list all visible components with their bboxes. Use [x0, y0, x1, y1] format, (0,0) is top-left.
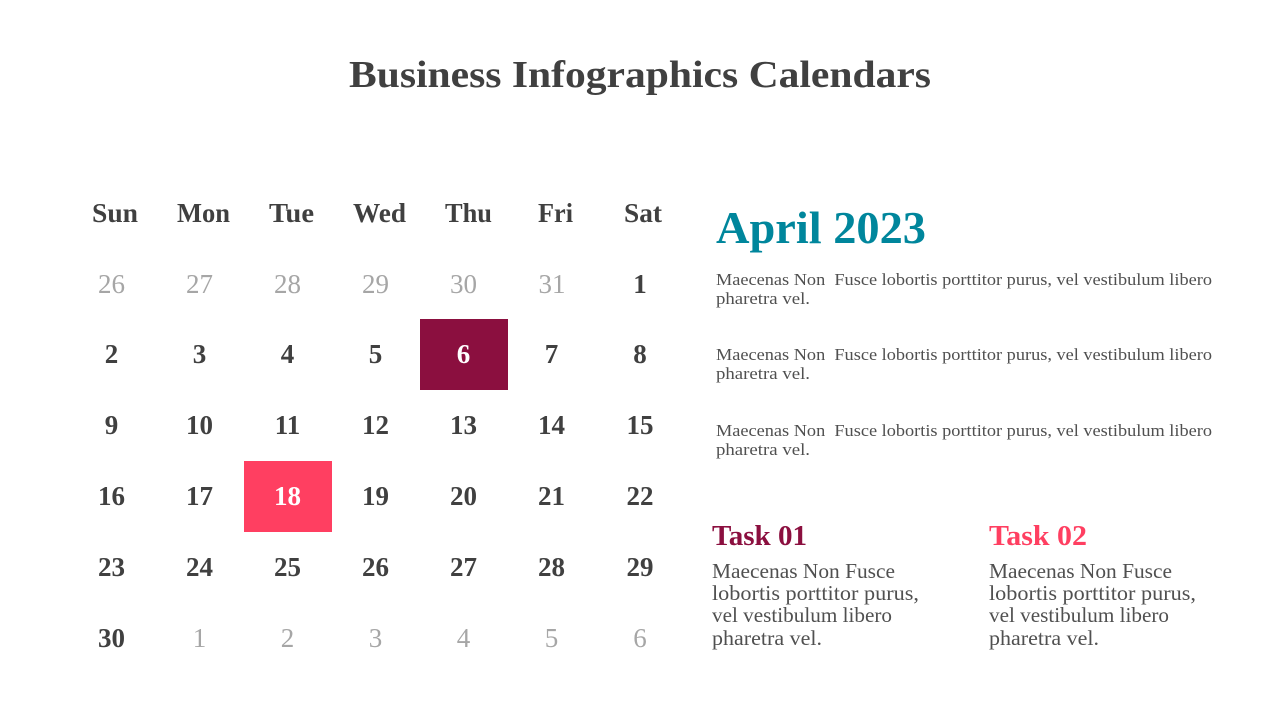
- text block 3: Maecenas Non Fusce lobortis porttitor purus, vel vestibulum libero: [716, 421, 1212, 440]
- text block 2: Maecenas Non Fusce lobortis porttitor purus, vel vestibulum libero: [716, 345, 1212, 364]
- task 02 description: lobortis porttitor purus,: [989, 581, 1196, 605]
- weekday header row: [92, 198, 662, 228]
- week row 1: 29: [362, 269, 389, 299]
- weekday header row: Thu: [445, 198, 492, 228]
- week row 5: 28: [538, 552, 565, 582]
- week row 3: 14: [538, 410, 565, 440]
- text block 3: pharetra vel.: [716, 440, 810, 459]
- text block 2: pharetra vel.: [716, 364, 810, 383]
- week row 2: 2: [105, 339, 118, 369]
- week row 2: 8: [633, 339, 647, 369]
- week row 2: 4: [281, 339, 294, 369]
- week row 4: 20: [450, 481, 477, 511]
- week row 1: 1: [633, 269, 647, 299]
- week row 4: 22: [626, 481, 654, 511]
- weekday header row: Sat: [624, 198, 662, 228]
- text block 1: [716, 270, 1212, 308]
- week row 3: 13: [450, 410, 477, 440]
- week row 4: 18: [274, 481, 301, 511]
- week row 6: [98, 623, 647, 653]
- week row 6: 6: [633, 623, 647, 653]
- week row 3: 15: [626, 410, 654, 440]
- week row 2: 6: [457, 339, 470, 369]
- week row 5: 29: [626, 552, 654, 582]
- week row 5: 24: [186, 552, 213, 582]
- weekday header row: Tue: [269, 198, 314, 228]
- week row 5: 26: [362, 552, 389, 582]
- week row 2: [105, 339, 647, 369]
- task 01 description: lobortis porttitor purus,: [712, 581, 919, 605]
- task 01 heading: Task 01: [712, 521, 807, 552]
- task 01 description: Maecenas Non Fusce: [712, 559, 895, 583]
- task 01 description: [712, 559, 919, 650]
- week row 6: 1: [193, 623, 206, 653]
- task 02 description: Maecenas Non Fusce: [989, 559, 1172, 583]
- highlight cell: April 18: [244, 461, 332, 532]
- text block 1: Maecenas Non Fusce lobortis porttitor purus, vel vestibulum libero: [716, 270, 1212, 289]
- weekday header row: Mon: [177, 198, 230, 228]
- text block 3: [716, 421, 1212, 459]
- week row 5: [98, 552, 654, 582]
- week row 4: [98, 481, 654, 511]
- weekday header row: Wed: [353, 198, 406, 228]
- task 01 description: vel vestibulum libero: [712, 603, 892, 627]
- week row 5: 27: [450, 552, 477, 582]
- title: Business Infographics Calendars: [349, 54, 931, 96]
- week row 4: 19: [362, 481, 389, 511]
- week row 3: 10: [186, 410, 213, 440]
- task 02 description: pharetra vel.: [989, 626, 1099, 650]
- week row 2: 7: [545, 339, 558, 369]
- week row 6: 2: [281, 623, 294, 653]
- week row 3: 9: [105, 410, 118, 440]
- task 02: [989, 521, 1196, 650]
- week row 5: 23: [98, 552, 125, 582]
- week row 3: 12: [362, 410, 389, 440]
- week row 4: 21: [538, 481, 565, 511]
- week row 3: [105, 410, 654, 440]
- calendar: [92, 198, 662, 653]
- week row 4: 17: [186, 481, 213, 511]
- week row 5: 25: [274, 552, 301, 582]
- week row 1: 30: [450, 269, 477, 299]
- month heading: April 2023: [716, 202, 926, 253]
- task 01: [712, 521, 919, 650]
- week row 2: 5: [369, 339, 382, 369]
- week row 3: 11: [275, 410, 300, 440]
- week row 1: 27: [186, 269, 213, 299]
- text block 2: [716, 345, 1212, 383]
- week row 2: 3: [193, 339, 206, 369]
- week row 1: [98, 269, 647, 299]
- week row 6: 30: [98, 623, 125, 653]
- week row 1: 28: [274, 269, 301, 299]
- weekday header row: Sun: [92, 198, 138, 228]
- task 02 description: [989, 559, 1196, 650]
- week row 6: 5: [545, 623, 558, 653]
- task 02 heading: Task 02: [989, 521, 1087, 552]
- highlight cell: April 6: [420, 319, 508, 390]
- week row 6: 3: [369, 623, 382, 653]
- week row 1: 26: [98, 269, 125, 299]
- week row 6: 4: [457, 623, 471, 653]
- week row 4: 16: [98, 481, 125, 511]
- text block 1: pharetra vel.: [716, 289, 810, 308]
- task 01 description: pharetra vel.: [712, 626, 822, 650]
- week row 1: 31: [538, 269, 566, 299]
- weekday header row: Fri: [538, 198, 573, 228]
- task 02 description: vel vestibulum libero: [989, 603, 1169, 627]
